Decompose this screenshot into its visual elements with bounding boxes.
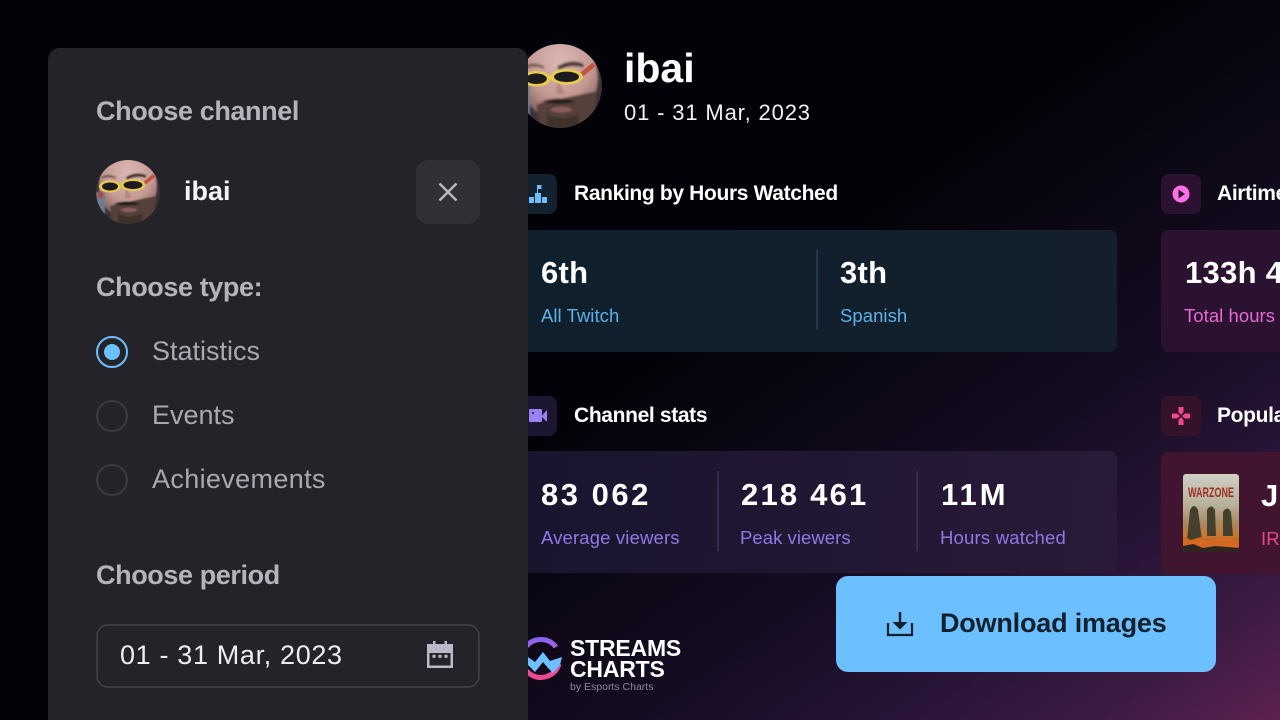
logo: streams charts: STREAMS	[570, 635, 681, 661]
radio: events	[96, 400, 128, 432]
icon: calendar	[427, 641, 453, 668]
button label: Download images	[940, 608, 1167, 638]
logo: streams charts	[528, 635, 681, 693]
panel: airtime: Total hours	[1184, 305, 1275, 326]
heading: choose channel: Choose channel	[96, 96, 299, 126]
heading: choose type: Choose type:	[96, 272, 262, 302]
panel: ranking by hours watched	[517, 230, 1117, 352]
panel: ranking by hours watched: All Twitch	[541, 305, 619, 326]
stat: average viewers: 83 062	[541, 477, 651, 512]
date range: 01 - 31 Mar, 2023	[624, 100, 811, 125]
button: clear channel	[416, 160, 480, 224]
heading: ranking: Ranking by Hours Watched	[574, 182, 838, 205]
option: achievements: Achievements	[152, 464, 326, 494]
panel: airtime	[1161, 230, 1280, 352]
avatar: selected channel	[96, 160, 160, 224]
icon: video camera	[517, 396, 557, 436]
option: statistics: Statistics	[152, 336, 260, 366]
icon: airtime play	[1161, 174, 1201, 214]
heading: channel stats: Channel stats	[574, 404, 707, 427]
icon: popular game controller	[1161, 396, 1201, 436]
button: download images	[836, 576, 1216, 672]
header: channel identity	[528, 44, 811, 128]
icon: download	[886, 612, 914, 636]
avatar: ibai	[528, 44, 602, 128]
channel name: ibai	[624, 45, 695, 91]
panel: sidebar controls	[48, 48, 528, 720]
panel: channel stats: Average viewers	[541, 527, 680, 548]
panel: channel stats: Hours watched	[940, 527, 1066, 548]
panel: channel stats	[517, 451, 1117, 573]
panel: popular game	[1161, 452, 1280, 574]
panel: ranking by hours watched: Spanish	[840, 305, 907, 326]
radio: achievements	[96, 464, 128, 496]
game cover: warzone	[1183, 474, 1239, 552]
logo: streams charts: CHARTS	[570, 656, 665, 682]
stat: hours watched: 11M	[941, 477, 1009, 512]
panel: channel stats: Peak viewers	[740, 527, 851, 548]
stat: spanish: 3th	[840, 255, 887, 290]
stat: peak viewers: 218 461	[741, 477, 868, 512]
radio: statistics selected	[96, 336, 128, 368]
option: events: Events	[152, 400, 235, 430]
icon: ranking podium	[517, 174, 557, 214]
stat: all twitch: 6th	[541, 255, 588, 290]
logo: streams charts: by Esports Charts	[570, 681, 653, 693]
heading: choose period: Choose period	[96, 560, 280, 590]
selected channel name: ibai	[184, 176, 231, 206]
input: date range	[96, 624, 480, 688]
date value: 01 - 31 Mar, 2023	[120, 640, 343, 670]
